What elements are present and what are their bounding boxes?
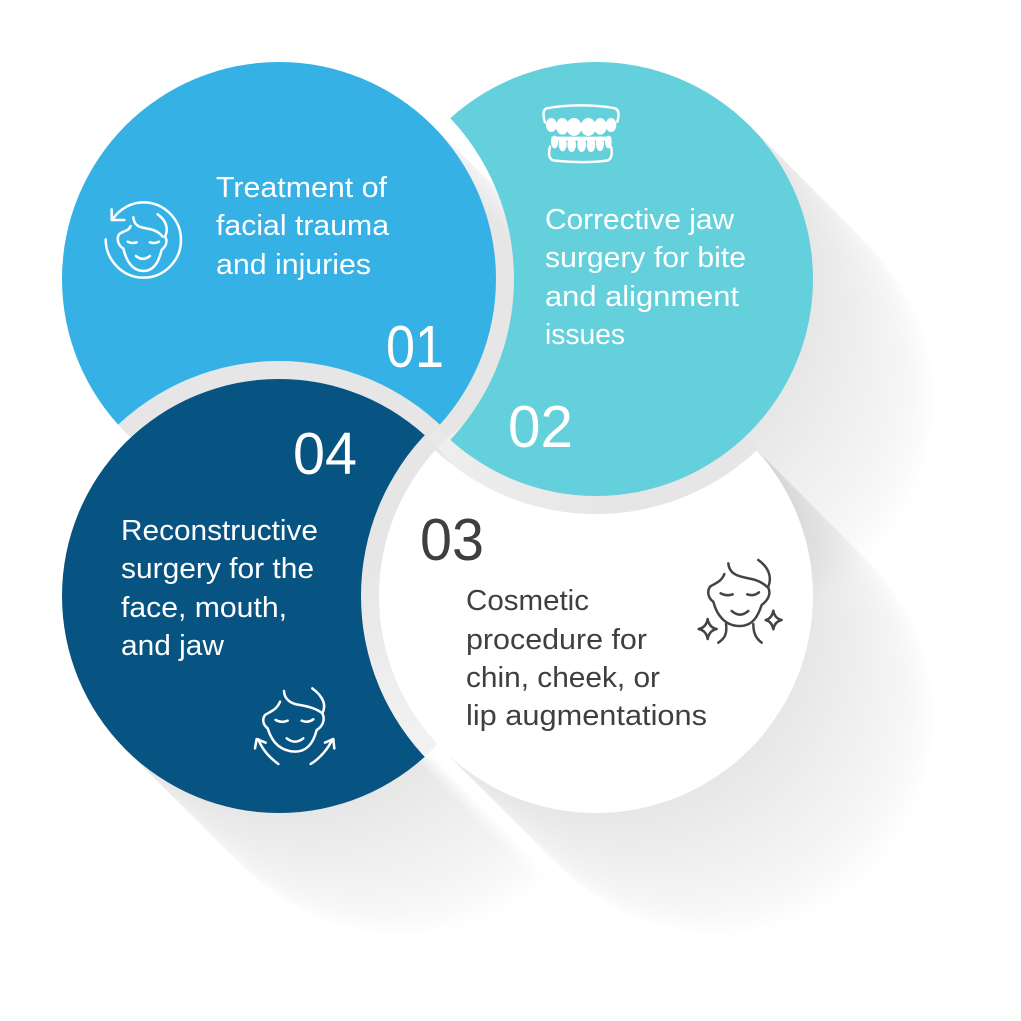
text: 04 description: Reconstructive: [121, 515, 318, 547]
text: 01 description: facial trauma: [216, 210, 390, 242]
overlap band: circle 03 over circle 04: [361, 442, 438, 754]
text: 04 description: and jaw: [121, 630, 225, 662]
long shadow: circle 04: [130, 754, 512, 906]
overlap band: circle 02 over circle 03: [452, 428, 756, 514]
icon: face with sparkles: [699, 560, 782, 643]
number 03: 03: [420, 507, 484, 573]
panel: 04 reconstructive surgery: [62, 379, 425, 813]
icon: face with rotating arrow: [106, 202, 181, 278]
text: 02 description: surgery for bite: [545, 242, 746, 274]
text: 01 description: Treatment of: [216, 172, 388, 204]
panel: 02 corrective jaw surgery: [450, 62, 813, 496]
number 02: 02: [508, 394, 573, 460]
long shadow: circle 02: [380, 63, 935, 618]
overlap band: circle 01 over circle 02: [438, 119, 502, 207]
text: 03 description: lip augmentations: [466, 700, 707, 732]
text: 03 description: Cosmetic: [466, 585, 589, 617]
number 04: 04: [293, 421, 357, 487]
text: 03 description: chin, cheek, or: [466, 662, 660, 694]
circle 03: [379, 450, 813, 813]
circle 04: [62, 379, 425, 813]
text: 02 description: and alignment: [545, 281, 739, 313]
panel: 03 cosmetic procedure: [379, 450, 813, 813]
centre crossing shade: [422, 422, 454, 454]
icon: teeth: [543, 105, 619, 162]
overlap band: circle 04 over circle 01: [118, 361, 433, 438]
circle 02: [450, 62, 813, 496]
panel: 01 facial trauma: [62, 62, 496, 425]
text: 01 description: and injuries: [216, 249, 371, 281]
icon: face with outward arrows: [255, 688, 334, 764]
number 01: 01: [386, 314, 444, 380]
text: 04 description: face, mouth,: [121, 592, 287, 624]
text: 02 description: issues: [545, 319, 625, 351]
circle 01: [62, 62, 496, 425]
long shadow: circle 03: [380, 380, 935, 935]
text: 02 description: Corrective jaw: [545, 204, 735, 236]
text: 04 description: surgery for the: [121, 553, 314, 585]
text: 03 description: procedure for: [466, 624, 647, 656]
